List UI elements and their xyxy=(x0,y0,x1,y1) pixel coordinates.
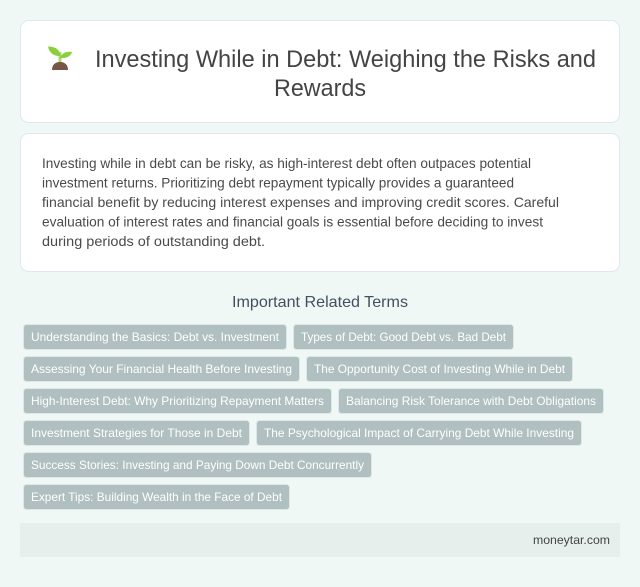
title: Rewards xyxy=(274,75,366,102)
tag xyxy=(24,484,290,510)
description text: evaluation of interest rates and financial goals is essential before deciding to invest xyxy=(42,214,543,230)
tag: Success Stories: Investing and Paying Down Debt Concurrently xyxy=(31,458,364,472)
tag: Balancing Risk Tolerance with Debt Obligations xyxy=(346,394,596,408)
tag xyxy=(256,420,582,446)
tags: related terms xyxy=(24,324,604,510)
tag: Understanding the Basics: Debt vs. Investment xyxy=(31,330,280,344)
description text xyxy=(42,155,559,249)
tag xyxy=(24,420,250,446)
tag xyxy=(24,388,332,414)
icon: seedling xyxy=(48,46,72,70)
title: Investing While in Debt: Weighing the Risks and xyxy=(95,46,596,73)
description text: Investing while in debt can be risky, as high-interest debt often outpaces potential xyxy=(42,155,531,171)
tag xyxy=(24,324,286,350)
tag xyxy=(24,452,372,478)
tag: Expert Tips: Building Wealth in the Face of Debt xyxy=(31,490,283,504)
tag xyxy=(294,324,514,350)
tag: The Psychological Impact of Carrying Debt While Investing xyxy=(264,426,574,440)
description text: investment returns. Prioritizing debt repayment typically provides a guaranteed xyxy=(42,174,514,190)
tag: The Opportunity Cost of Investing While in Debt xyxy=(314,362,566,376)
tag: Assessing Your Financial Health Before Investing xyxy=(31,362,292,376)
panel: header xyxy=(20,20,620,122)
tag xyxy=(338,388,604,414)
heading: related terms: Important Related Terms xyxy=(232,294,408,311)
description text: during periods of outstanding debt. xyxy=(42,233,265,249)
description text: financial benefit by reducing interest expenses and improving credit scores. Careful xyxy=(42,194,559,210)
tag: Types of Debt: Good Debt vs. Bad Debt xyxy=(301,330,507,344)
title xyxy=(95,46,596,102)
tag xyxy=(306,356,572,382)
panel: description xyxy=(20,134,620,272)
tag xyxy=(24,356,300,382)
tag: Investment Strategies for Those in Debt xyxy=(31,426,243,440)
footer xyxy=(20,523,620,557)
footer: moneytar.com xyxy=(533,533,610,547)
tag: High-Interest Debt: Why Prioritizing Repayment Matters xyxy=(31,394,324,408)
